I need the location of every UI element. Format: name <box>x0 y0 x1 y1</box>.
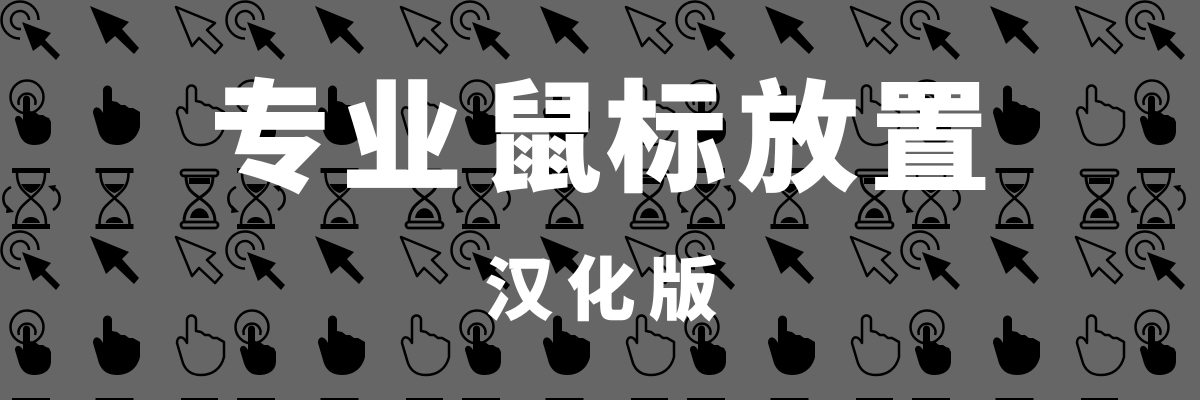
title: 专业鼠标放置 <box>210 73 990 207</box>
subtitle: 汉化版 <box>484 252 718 329</box>
